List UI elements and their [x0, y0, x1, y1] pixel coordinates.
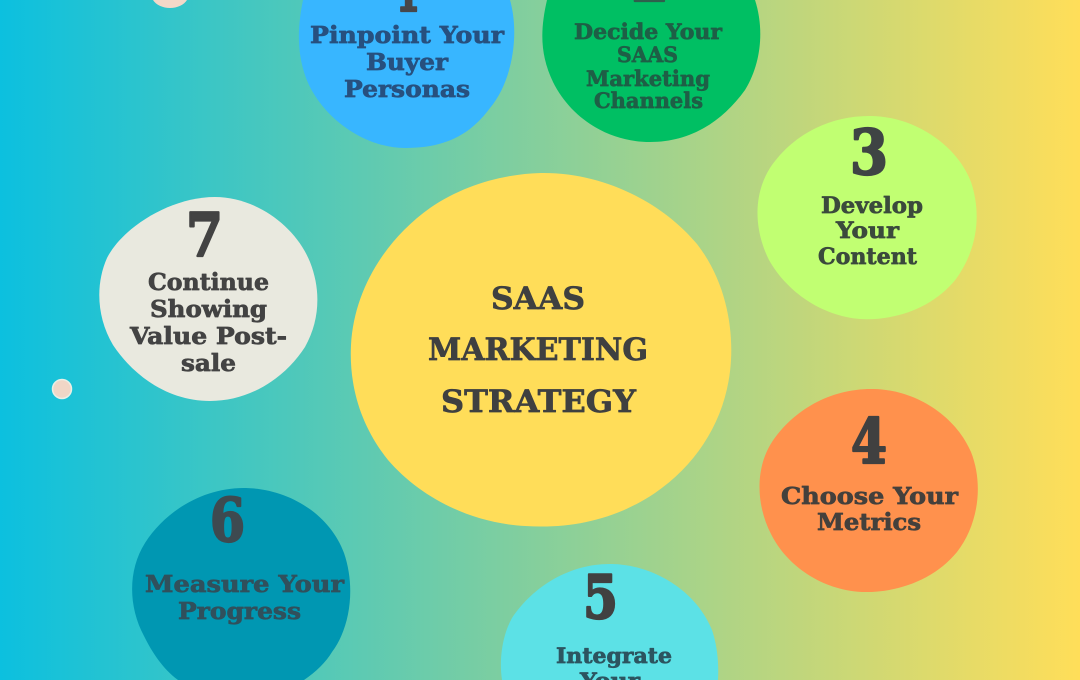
step 3: Develop Your Content: 3 — [850, 116, 888, 189]
step 1: Pinpoint Your Buyer Personas: Buyer — [366, 49, 449, 76]
step 6: Measure Your Progress — [132, 486, 350, 680]
step 5: Integrate Your — [501, 563, 718, 680]
step 1: Pinpoint Your Buyer Personas: Pinpoint Your — [310, 22, 505, 49]
step 4: Choose Your Metrics — [760, 389, 978, 592]
step 3: Develop Your Content: Develop — [821, 193, 923, 219]
center circle: SAAS Marketing Strategy: MARKETING — [428, 332, 648, 368]
step 6: Measure Your Progress: 6 — [210, 486, 245, 556]
center circle: SAAS Marketing Strategy — [351, 173, 731, 527]
step 7: Continue Showing Value Post-sale: Showing — [150, 296, 267, 323]
step 2: Decide Your SAAS Marketing Channels: Marketing — [586, 66, 710, 91]
step 7: Continue Showing Value Post-sale: Value Post- — [129, 323, 287, 350]
step 6: Measure Your Progress: Measure Your — [145, 571, 345, 598]
step 2: Decide Your SAAS Marketing Channels: Channels — [594, 88, 703, 113]
step 1: Pinpoint Your Buyer Personas — [299, 0, 514, 148]
decorative dot: top — [153, 0, 187, 8]
step 7: Continue Showing Value Post-sale: 7 — [186, 201, 223, 271]
step 3: Develop Your Content: Content — [818, 244, 918, 270]
step 7: Continue Showing Value Post-sale — [99, 197, 317, 401]
step 5: Integrate Your: Integrate — [556, 643, 672, 668]
center circle: SAAS Marketing Strategy: STRATEGY — [441, 384, 637, 420]
center circle: SAAS Marketing Strategy: SAAS — [491, 281, 585, 317]
step 2: Decide Your SAAS Marketing Channels: Decide Your — [574, 19, 723, 44]
step 7: Continue Showing Value Post-sale: Continue — [148, 269, 269, 296]
step 4: Choose Your Metrics: Metrics — [817, 509, 921, 536]
step 2: Decide Your SAAS Marketing Channels: SAAS — [617, 42, 678, 67]
step 4: Choose Your Metrics: Choose Your — [781, 483, 959, 510]
step 3: Develop Your Content — [758, 116, 977, 319]
step 6: Measure Your Progress: Progress — [178, 598, 301, 625]
step 3: Develop Your Content: Your — [835, 218, 899, 244]
step 1: Pinpoint Your Buyer Personas: Personas — [344, 76, 470, 103]
step 2: Decide Your SAAS Marketing Channels — [542, 0, 760, 142]
step 4: Choose Your Metrics: 4 — [851, 405, 887, 478]
decorative dot: left — [52, 380, 72, 398]
step 7: Continue Showing Value Post-sale: sale — [181, 350, 236, 377]
step 5: Integrate Your: 5 — [583, 563, 618, 633]
